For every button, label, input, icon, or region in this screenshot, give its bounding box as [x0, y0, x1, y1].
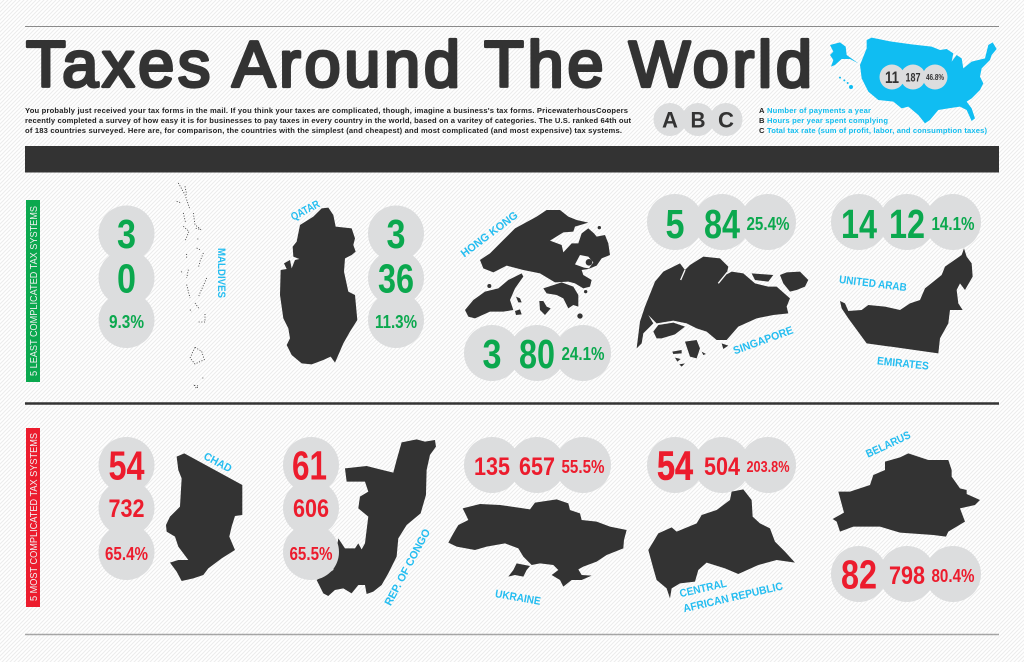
stats circles [98, 437, 154, 580]
stats circles: 0 [117, 256, 136, 302]
section label: least complicated: 5 LEAST COMPLICATED TAX SYSTEMS [29, 206, 40, 376]
legend text [759, 106, 987, 135]
stats circles: 203.8% [746, 459, 790, 476]
panel: Ukraine [448, 437, 627, 608]
panel: Maldives [98, 183, 227, 389]
panel: Hong Kong [459, 210, 611, 381]
label: United Arab Emirates: UNITED ARAB [838, 274, 907, 294]
label: Singapore: SINGAPORE [732, 325, 795, 357]
map: Singapore [637, 257, 808, 367]
legend text: A [759, 106, 765, 115]
legend circles: A B C: A [662, 108, 678, 132]
stats circles: 12 [889, 201, 925, 247]
stats circles [831, 194, 981, 250]
label: United Arab Emirates: EMIRATES [876, 355, 929, 373]
label: Central African Republic: CENTRAL [678, 578, 728, 600]
map: United States with stats: 11 [885, 68, 899, 87]
stats circles: 65.4% [105, 544, 148, 564]
map: Chad [166, 453, 242, 581]
stats circles: 61 [292, 442, 327, 488]
stats circles: 9.3% [109, 312, 144, 332]
label: Ukraine: UKRAINE [494, 588, 542, 608]
stats circles: 3 [117, 211, 136, 257]
section label: most complicated: 5 MOST COMPLICATED TAX SYSTEMS [29, 433, 40, 601]
panel: Chad [98, 437, 242, 581]
legend circles: A B C: C [718, 108, 734, 132]
stats circles: 24.1% [562, 344, 604, 364]
panel: Belarus [831, 429, 981, 602]
dark banner bar [25, 146, 999, 172]
stats circles: 65.5% [290, 544, 332, 564]
map: Hong Kong [465, 210, 610, 319]
stats circles [831, 546, 981, 602]
stats circles: 25.4% [746, 214, 790, 234]
label: Qatar: QATAR [289, 198, 322, 223]
stats circles: 36 [378, 256, 414, 302]
stats circles: 135 [474, 453, 510, 481]
stats circles: 14.1% [932, 214, 974, 234]
stats circles: 82 [841, 552, 877, 598]
map: UAE [840, 248, 973, 353]
stats circles [464, 437, 611, 493]
stats circles: 5 [666, 201, 684, 247]
intro text block [25, 106, 631, 135]
panel: United Arab Emirates [831, 194, 981, 373]
stats circles: 3 [386, 211, 406, 257]
label: Central African Republic: AFRICAN REPUBLIC [682, 581, 784, 615]
stats circles: 606 [293, 495, 329, 523]
label: Chad: CHAD [201, 451, 234, 475]
stats circles: 798 [889, 562, 925, 590]
label: Hong Kong: HONG KONG [459, 210, 520, 260]
stats circles [647, 437, 796, 493]
stats circles [98, 206, 154, 348]
label: Republic of Congo: REP. OF CONGO [383, 527, 433, 608]
stats circles: 504 [704, 453, 740, 481]
legend text: C [759, 126, 765, 135]
stats circles: 84 [704, 201, 740, 247]
stats circles: 657 [519, 453, 555, 481]
map: Ukraine [448, 499, 627, 587]
stats circles [464, 325, 611, 381]
map: United States with stats: 187 [906, 70, 921, 84]
label: United Arab Emirates [838, 274, 929, 373]
map: Central African Republic [648, 489, 795, 598]
stats circles: 54 [657, 442, 693, 488]
legend circles: A B C: B [690, 108, 706, 132]
legend text: Total tax rate (sum of profit, labor, and consumption taxes) [767, 126, 987, 135]
legend text: B [759, 116, 765, 125]
map: United States with stats: 46.8% [926, 73, 944, 82]
stats circles [647, 194, 796, 250]
stats circles [283, 437, 339, 580]
map: United States with stats [830, 38, 997, 123]
stats circles: 3 [482, 331, 502, 377]
stats circles [368, 206, 424, 348]
panel: Qatar [280, 198, 424, 364]
map: Qatar [280, 208, 357, 364]
legend text: Hours per year spent complying [767, 116, 888, 125]
stats circles: 14 [841, 201, 877, 247]
stats circles: 80.4% [932, 566, 974, 586]
panel: Central African Republic [647, 437, 796, 615]
title: Taxes Around The World [26, 28, 812, 100]
stats circles: 80 [519, 331, 555, 377]
label: Belarus: BELARUS [864, 429, 913, 460]
legend text: Number of payments a year [767, 106, 871, 115]
panel: Republic of Congo [283, 437, 436, 608]
map: Republic of Congo [317, 439, 436, 596]
label: Maldives: MALDIVES [215, 248, 227, 298]
stats circles: 11.3% [375, 312, 417, 332]
intro text block: recently completed a survey of how easy it is for businesses to pay taxes in every country in the world, based on a varitey of categories. The U.S. ranked 64th out [25, 116, 631, 125]
stats circles: 55.5% [562, 457, 604, 477]
stats circles: 732 [108, 495, 144, 523]
panel: Singapore [637, 194, 808, 367]
map: Maldives [177, 183, 207, 389]
stats circles: 54 [108, 442, 145, 488]
map: Belarus [833, 453, 980, 537]
intro text block: You probably just received your tax forms in the mail. If you think your taxes are complicated, though, imagine a business's tax forms. PricewaterhousCoopers [25, 106, 628, 115]
legend circles: A B C [654, 103, 742, 136]
intro text block: of 183 countries surveyed. Here are, for comparison, the countries with the simplest (and cheapest) and most complicated (and most expensive) tax systems. [25, 126, 622, 135]
